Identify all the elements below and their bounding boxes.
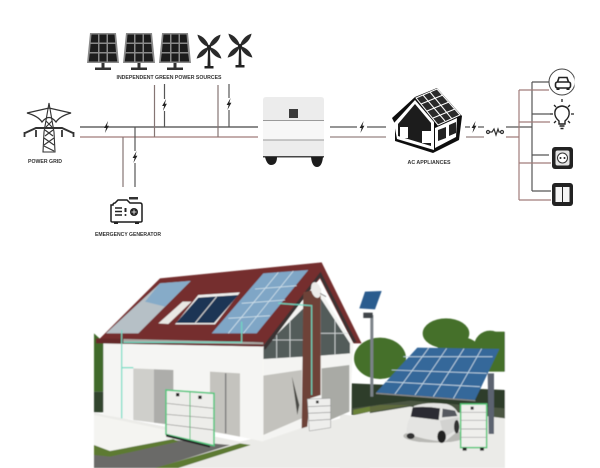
chimney (302, 288, 321, 428)
gravel and lawn (94, 407, 370, 468)
icon: house with solar roof (392, 88, 462, 153)
icon: bolt on grid line (104, 121, 109, 133)
icon: emergency generator (111, 197, 142, 224)
car (407, 403, 459, 443)
wiring: battery to house (330, 127, 386, 137)
ground (340, 407, 505, 468)
icon: electric car (549, 66, 580, 98)
icon: bolt battery to house (360, 121, 364, 133)
carport solar panel (376, 348, 499, 401)
icon: solar panel 2 (123, 33, 155, 70)
icon: wall socket (552, 147, 573, 169)
battery unit (263, 97, 324, 167)
icon: wind turbine 1 (195, 33, 223, 68)
icon: bolt house to meter (472, 121, 476, 133)
icon: bolt on wind feed (227, 98, 231, 110)
car shadow (403, 429, 467, 443)
left roof solar panel (106, 281, 191, 333)
solar thermal collectors (175, 292, 240, 324)
icon: bolt on generator feed (133, 151, 137, 163)
right wing wall and glazing (263, 285, 353, 441)
icon: bolt on solar feed (162, 99, 167, 111)
skylights (158, 302, 192, 324)
icon: light switch (552, 183, 573, 206)
background hedge (352, 383, 505, 418)
heading: green power sources: INDEPENDENT GREEN POWER SOURCES (116, 75, 222, 81)
tower battery stack (307, 398, 331, 431)
icon: solar panel 3 (159, 33, 191, 70)
front wall (103, 343, 263, 442)
wiring: main bus from grid to battery (80, 84, 258, 187)
ground (94, 412, 370, 468)
icon: solar panel 1 (87, 33, 119, 70)
photo: right side carport scene (340, 291, 518, 468)
satellite dish (309, 281, 326, 299)
wiring: house to appliances (465, 82, 551, 200)
label: power grid: POWER GRID (28, 159, 62, 165)
windows (133, 368, 240, 437)
left tree and hedge (94, 333, 107, 412)
indoor wall battery stack (166, 390, 214, 448)
icon: light bulb (550, 99, 574, 128)
carport battery stack (461, 404, 487, 451)
roof (96, 262, 362, 350)
icon: switch symbol (486, 129, 504, 135)
label: ac appliances: AC APPLIANCES (408, 160, 451, 166)
street light with panel (359, 291, 382, 397)
energy flow lines (122, 303, 312, 418)
white crop at right (505, 320, 518, 468)
panel: system diagram (24, 32, 580, 238)
icon: wind turbine 2 (226, 32, 254, 68)
label: emergency generator: EMERGENCY GENERATOR (95, 232, 161, 238)
post (488, 373, 494, 434)
icon: power grid pylon (24, 103, 74, 152)
trees (354, 318, 506, 379)
right roof solar panel (212, 270, 308, 333)
photo: main house (94, 262, 370, 468)
